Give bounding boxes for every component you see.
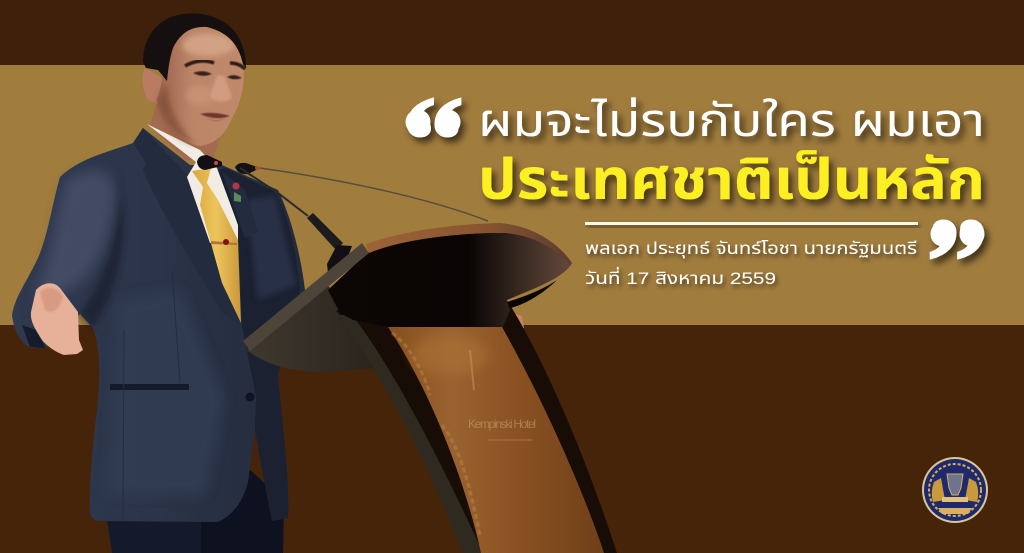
side seam [123, 270, 180, 518]
attribution name: พลเอก ประยุทธ์ จันทร์โอชา นายกรัฐมนตรี [585, 239, 917, 259]
panel engraving: Kempinski Hotel [468, 417, 536, 431]
seal: left guardian lion [932, 478, 945, 502]
face [157, 26, 244, 146]
closing quote mark: ” [926, 194, 988, 332]
lectern outer column [336, 305, 617, 553]
suit jacket [12, 128, 305, 522]
microphones [197, 155, 260, 174]
background: dark brown top [0, 0, 1024, 66]
body highlight [108, 290, 225, 495]
nose [211, 75, 232, 102]
lectern copper panel [388, 327, 604, 553]
trousers [107, 470, 284, 553]
right chest lighter area [246, 195, 296, 300]
seal: central urn [947, 474, 963, 495]
hip pocket [110, 384, 189, 390]
lectern front edge [243, 243, 369, 351]
mic wire to lectern [260, 168, 488, 221]
cuff [22, 325, 46, 348]
neck [150, 92, 222, 160]
sleeve shadow crease [80, 170, 124, 328]
lower lip [206, 118, 226, 122]
open hand [31, 283, 83, 355]
right lapel and front panel [218, 168, 300, 521]
lectern copper rim [366, 223, 572, 266]
attribution date: วันที่ 17 สิงหาคม 2559 [585, 266, 776, 288]
panel warm patch [412, 335, 488, 375]
eyebrows [185, 61, 245, 69]
sleeve highlight [34, 171, 115, 298]
seal: right guardian lion [965, 478, 978, 502]
button [246, 392, 254, 402]
fingers behind lectern [510, 312, 524, 328]
head [142, 13, 246, 146]
lectern shelf underside [247, 286, 376, 372]
lectern [243, 223, 617, 553]
mic base [307, 213, 352, 282]
cheek highlight [186, 85, 214, 105]
hair [143, 13, 246, 81]
mic stem [240, 168, 308, 216]
lectern side strip [337, 315, 483, 553]
icon: government seal [922, 457, 988, 523]
right lapel highlight [222, 172, 258, 238]
seal: lower ribbon [938, 508, 972, 514]
ear [142, 68, 162, 104]
photo: speaker in suit [12, 13, 488, 553]
shirt collar [147, 124, 238, 243]
forehead highlight [182, 34, 234, 56]
panel engraving [468, 350, 536, 440]
lectern shadow slot [507, 280, 557, 308]
necktie [192, 168, 241, 323]
divider rule [585, 222, 918, 225]
mouth [200, 113, 230, 118]
lapel pins [232, 182, 241, 202]
background: dark brown bottom [0, 325, 1024, 553]
eyes [193, 71, 242, 79]
lectern top surface [328, 233, 571, 327]
cheek shadow [157, 85, 196, 145]
headline line 1: ผมจะไม่รบกับใคร ผมเอา [478, 94, 985, 146]
headline line 2: ประเทศชาติเป็นหลัก [478, 148, 985, 212]
seal: base platform [942, 497, 968, 502]
left lapel [133, 128, 240, 326]
panel ornament left [392, 333, 480, 535]
opening quote mark: “ [402, 72, 464, 210]
background: gold band [0, 65, 1024, 325]
